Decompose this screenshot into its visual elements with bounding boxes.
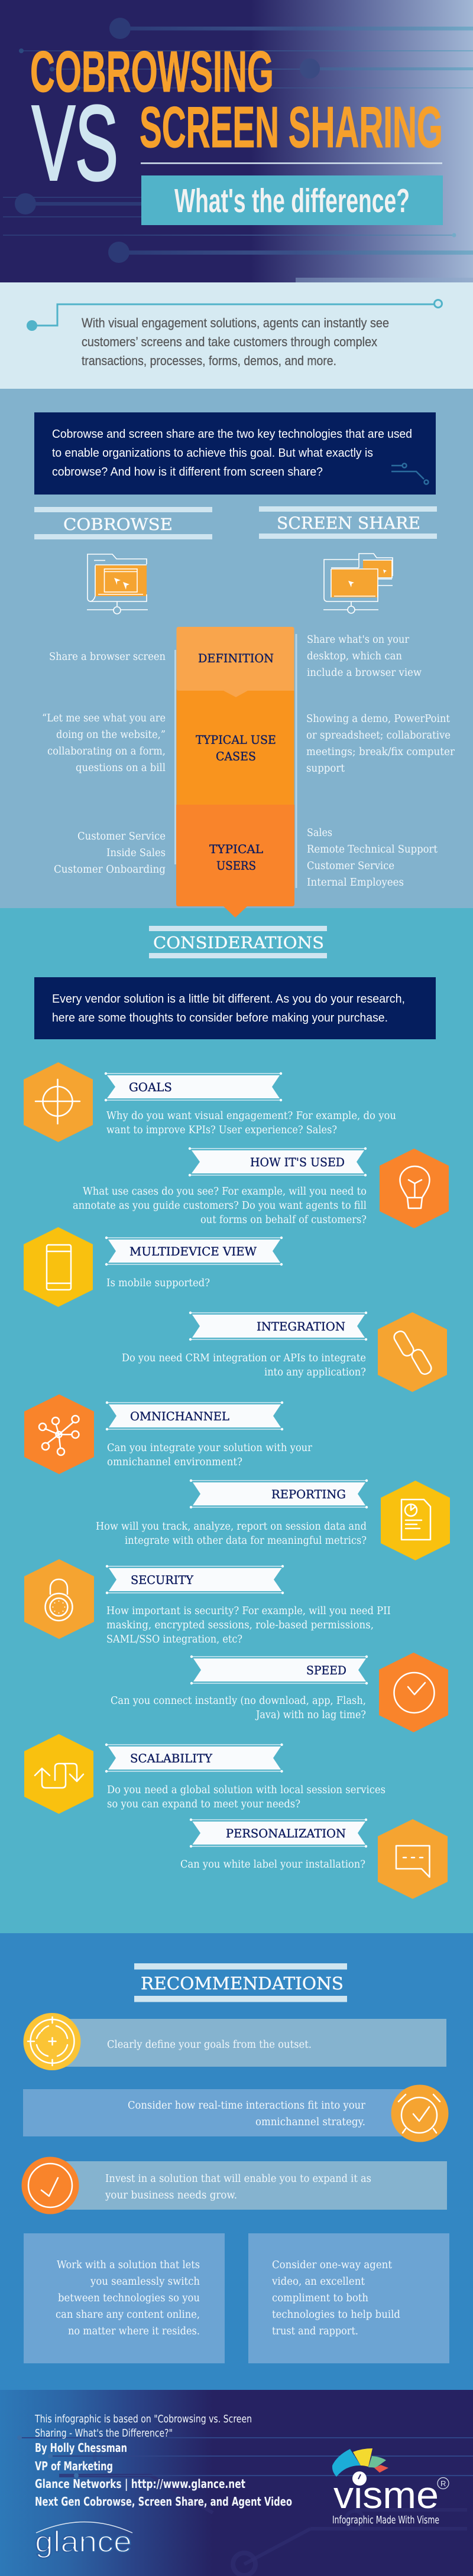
text: goals: Why do you want visual engagement? For example, do you (106, 1110, 396, 1122)
consideration: reporting (96, 1479, 450, 1560)
banner: scalability: SCALABILITY (130, 1752, 213, 1765)
text: recommendation 3: Invest in a solution that will enable you to expand it as (105, 2173, 371, 2185)
recommendation 1 (24, 2013, 446, 2070)
text: source credit: Sharing - What's the Difference?" (35, 2427, 173, 2440)
text: recommendation 1: Clearly define your goals from the outset. (107, 2039, 312, 2051)
panel: recommendations background (0, 1933, 473, 2390)
consideration: integration (122, 1312, 447, 1392)
callout: considerations intro: here are some thoughts to consider before making your purchase. (52, 1011, 388, 1024)
text: screen share column: Remote Technical Support (307, 844, 438, 856)
recommendation 5: compliment to both (272, 2292, 368, 2304)
consideration: personalization (180, 1819, 448, 1899)
text: reporting (96, 1521, 367, 1547)
text: screen share column: Internal Employees (307, 877, 404, 889)
banner: integration: INTEGRATION (257, 1320, 345, 1333)
text: screen share column: or spreadsheet; collaborative (306, 730, 451, 741)
heading: recommendations: RECOMMENDATIONS (141, 1973, 344, 1993)
callout: definition intro: cobrowse? And how is it different from screen share? (52, 465, 323, 479)
title: cobrowsing: COBROWSING (30, 39, 274, 104)
text: speed: Can you connect instantly (no download, app, Flash, (111, 1695, 366, 1707)
panel: intro (0, 282, 473, 389)
icon: alarm clock badge (391, 2084, 448, 2142)
consideration: how it's used (73, 1147, 449, 1228)
callout: definition intro: Cobrowse and screen share are the two key technologies that are used (52, 427, 412, 441)
panel: typical users row: USERS (216, 859, 256, 873)
icon: scale arrows (24, 1734, 93, 1814)
banner: personalization: PERSONALIZATION (226, 1827, 346, 1840)
icon: target badge (24, 2013, 80, 2070)
text: personalization: Can you white label your installation? (180, 1859, 365, 1871)
intro text: customers’ screens and take customers through complex (82, 334, 377, 349)
recommendation 5: Consider one-way agent (272, 2259, 392, 2271)
text: scalability: Do you need a global solution with local session services (107, 1784, 385, 1796)
recommendation 4: Work with a solution that lets (57, 2259, 200, 2271)
logo: visme: visme (333, 2474, 439, 2516)
panel: header (0, 0, 473, 282)
text: speed: Java) with no lag time? (255, 1709, 366, 1721)
icon: cobrowse folder (87, 554, 148, 614)
heading: considerations (149, 926, 327, 958)
text: security (106, 1605, 391, 1645)
heading: cobrowse: COBROWSE (63, 515, 173, 534)
banner: reporting (190, 1479, 368, 1508)
recommendation 2 (23, 2084, 448, 2142)
text: screen share column: meetings; break/fix computer (306, 746, 455, 758)
heading: cobrowse (34, 507, 212, 539)
banner: multidevice view: MULTIDEVICE VIEW (129, 1245, 257, 1258)
text: cobrowse column: Share a browser screen (49, 651, 166, 663)
header circuit lines (3, 18, 473, 282)
banner: how it's used: HOW IT'S USED (250, 1156, 345, 1169)
text: cobrowse column: questions on a bill (76, 762, 166, 774)
recommendation 5: trust and rapport. (272, 2325, 358, 2337)
banner: personalization (190, 1819, 367, 1848)
logo: visme: R (440, 2479, 446, 2488)
intro text: transactions, processes, forms, demos, and more. (82, 353, 336, 368)
text: speed (111, 1695, 366, 1721)
banner: goals (105, 1072, 282, 1101)
text: screen share column: include a browser view (307, 667, 422, 679)
text: source credit: Glance Networks | http://www.glance.net (35, 2477, 245, 2491)
banner: scalability (105, 1744, 283, 1772)
panel: typical use cases row: TYPICAL USE (196, 733, 276, 747)
intro text (82, 316, 389, 368)
divider rule (141, 162, 442, 164)
text: cobrowse column: collaborating on a form, (47, 746, 166, 757)
text: reporting: How will you track, analyze, report on session data and (96, 1521, 367, 1533)
recommendation 4: between technologies so you (58, 2292, 200, 2304)
icon: target (24, 1062, 93, 1142)
text: screen share column: Showing a demo, PowerPoint (306, 713, 450, 725)
panel: footer (0, 2390, 473, 2576)
icon: light bulb (380, 1149, 449, 1228)
comparison spine outline (175, 634, 296, 888)
recommendation 4: can share any content online, (56, 2309, 200, 2321)
text: screen share column (306, 634, 455, 889)
icon: check badge (21, 2157, 79, 2214)
text: screen share column: desktop, which can (307, 650, 402, 662)
icon: phone (24, 1227, 93, 1307)
icon: network (24, 1394, 94, 1474)
text: omnichannel: Can you integrate your solution with your (107, 1442, 313, 1454)
text: screen share column: Sales (307, 827, 332, 839)
callout: considerations intro: Every vendor solution is a little bit different. As you do your research, (52, 992, 405, 1006)
recommendation 5: video, an excellent (271, 2276, 365, 2288)
panel: typical users row: TYPICAL (209, 843, 263, 856)
text: screen share column: Share what's on your (307, 634, 410, 646)
icon: screen share folders (323, 554, 393, 613)
text: security: SAML/SSO integration, etc? (106, 1634, 242, 1645)
banner: omnichannel: OMNICHANNEL (130, 1410, 229, 1423)
banner: speed (190, 1655, 368, 1684)
recommendation 4: you seamlessly switch (90, 2276, 200, 2288)
text: security: How important is security? For example, will you need PII (106, 1605, 391, 1617)
heading: recommendations (134, 1963, 347, 2002)
text: source credit (34, 2413, 292, 2509)
text: scalability: so you can expand to meet your needs? (107, 1798, 300, 1810)
icon: lock (24, 1559, 94, 1639)
subtitle box (141, 175, 443, 225)
text: omnichannel: omnichannel environment? (107, 1456, 242, 1468)
banner: security (106, 1565, 284, 1594)
text: recommendation 2: omnichannel strategy. (255, 2116, 365, 2128)
text: recommendation 3 (105, 2173, 371, 2201)
text: multidevice view: Is mobile supported? (106, 1277, 210, 1289)
text: how it's used (73, 1186, 367, 1226)
text: cobrowse column: Customer Onboarding (54, 864, 166, 876)
text: recommendation 3: your business needs grow. (105, 2190, 237, 2201)
banner: how it's used (189, 1147, 367, 1176)
recommendation 4 (24, 2233, 225, 2363)
text: integration (122, 1352, 366, 1378)
banner: omnichannel (106, 1401, 283, 1430)
banner: reporting: REPORTING (271, 1488, 346, 1501)
heading: screen share (259, 506, 437, 539)
consideration: security (24, 1559, 391, 1645)
recommendation 3 (21, 2157, 447, 2214)
icon: report document (381, 1481, 450, 1560)
callout: definition intro: to enable organizations to achieve this goal. But what exactly is (52, 446, 373, 460)
consideration: speed (111, 1653, 448, 1732)
consideration: multidevice view (24, 1227, 283, 1307)
text: omnichannel (107, 1442, 313, 1468)
panel: comparison background (0, 389, 473, 908)
panel: typical users row (176, 805, 294, 918)
banner: security: SECURITY (131, 1573, 194, 1587)
footer circuit lines (17, 2435, 473, 2575)
heading: considerations: CONSIDERATIONS (153, 934, 324, 952)
intro connector (27, 300, 442, 331)
panel: definition row (176, 627, 294, 697)
intro text: With visual engagement solutions, agents can instantly see (82, 316, 389, 330)
text: source credit: This infographic is based on "Cobrowsing vs. Screen (34, 2413, 252, 2425)
text: cobrowse column: Inside Sales (106, 847, 166, 859)
callout: considerations intro (34, 977, 436, 1039)
text: screen share column: Customer Service (307, 860, 394, 872)
text: source credit: Next Gen Cobrowse, Screen Share, and Agent Video (35, 2494, 292, 2509)
text: scalability (107, 1784, 385, 1810)
logo: visme (332, 2448, 449, 2526)
text: how it's used: annotate as you guide customers? Do you want agents to fill (73, 1200, 367, 1212)
panel: considerations background (0, 908, 473, 1933)
text: reporting: integrate with other data for meaningful metrics? (125, 1535, 367, 1547)
icon: clock check (379, 1653, 448, 1732)
icon: chain link (378, 1312, 447, 1392)
heading: screen share: SCREEN SHARE (277, 513, 420, 533)
recommendation 5 (248, 2233, 449, 2363)
consideration: omnichannel (24, 1394, 313, 1474)
text: cobrowse column: Customer Service (77, 831, 166, 843)
recommendation 4: no matter where it resides. (68, 2325, 200, 2337)
text: source credit: VP of Marketing (35, 2459, 113, 2473)
panel: definition row: DEFINITION (198, 652, 274, 665)
text: cobrowse column: doing on the website,” (56, 729, 166, 741)
text: screen share column: support (306, 763, 345, 775)
consideration: scalability (24, 1734, 385, 1814)
recommendation 5: technologies to help build (272, 2309, 400, 2321)
panel: typical use cases row: CASES (216, 750, 256, 763)
banner: integration (189, 1312, 367, 1341)
text: source credit: By Holly Chessman (35, 2441, 127, 2455)
logo: glance: glance (35, 2525, 132, 2558)
text: cobrowse column: “Let me see what you are (42, 713, 166, 724)
text: how it's used: out forms on behalf of customers? (200, 1214, 367, 1226)
text: goals: want to improve KPIs? User experience? Sales? (106, 1124, 337, 1136)
banner: speed: SPEED (306, 1664, 346, 1677)
text: goals (106, 1110, 396, 1136)
text: cobrowse column (42, 651, 166, 876)
text: recommendation 2 (128, 2100, 366, 2128)
text: how it's used: What use cases do you see? For example, will you need to (83, 1186, 367, 1198)
text: integration: Do you need CRM integration or APIs to integrate (122, 1352, 366, 1364)
panel: typical use cases row (176, 688, 294, 805)
consideration: goals (24, 1062, 396, 1142)
icon: chat bubble (378, 1819, 448, 1899)
text: integration: into any application? (264, 1367, 366, 1378)
callout: definition intro (34, 412, 436, 495)
banner: goals: GOALS (129, 1081, 172, 1094)
title: vs: VS (32, 84, 118, 203)
banner: multidevice view (105, 1237, 283, 1266)
text: recommendation 2: Consider how real-time interactions fit into your (128, 2100, 366, 2112)
text: security: masking, encrypted sessions, role-based permissions, (106, 1619, 374, 1631)
